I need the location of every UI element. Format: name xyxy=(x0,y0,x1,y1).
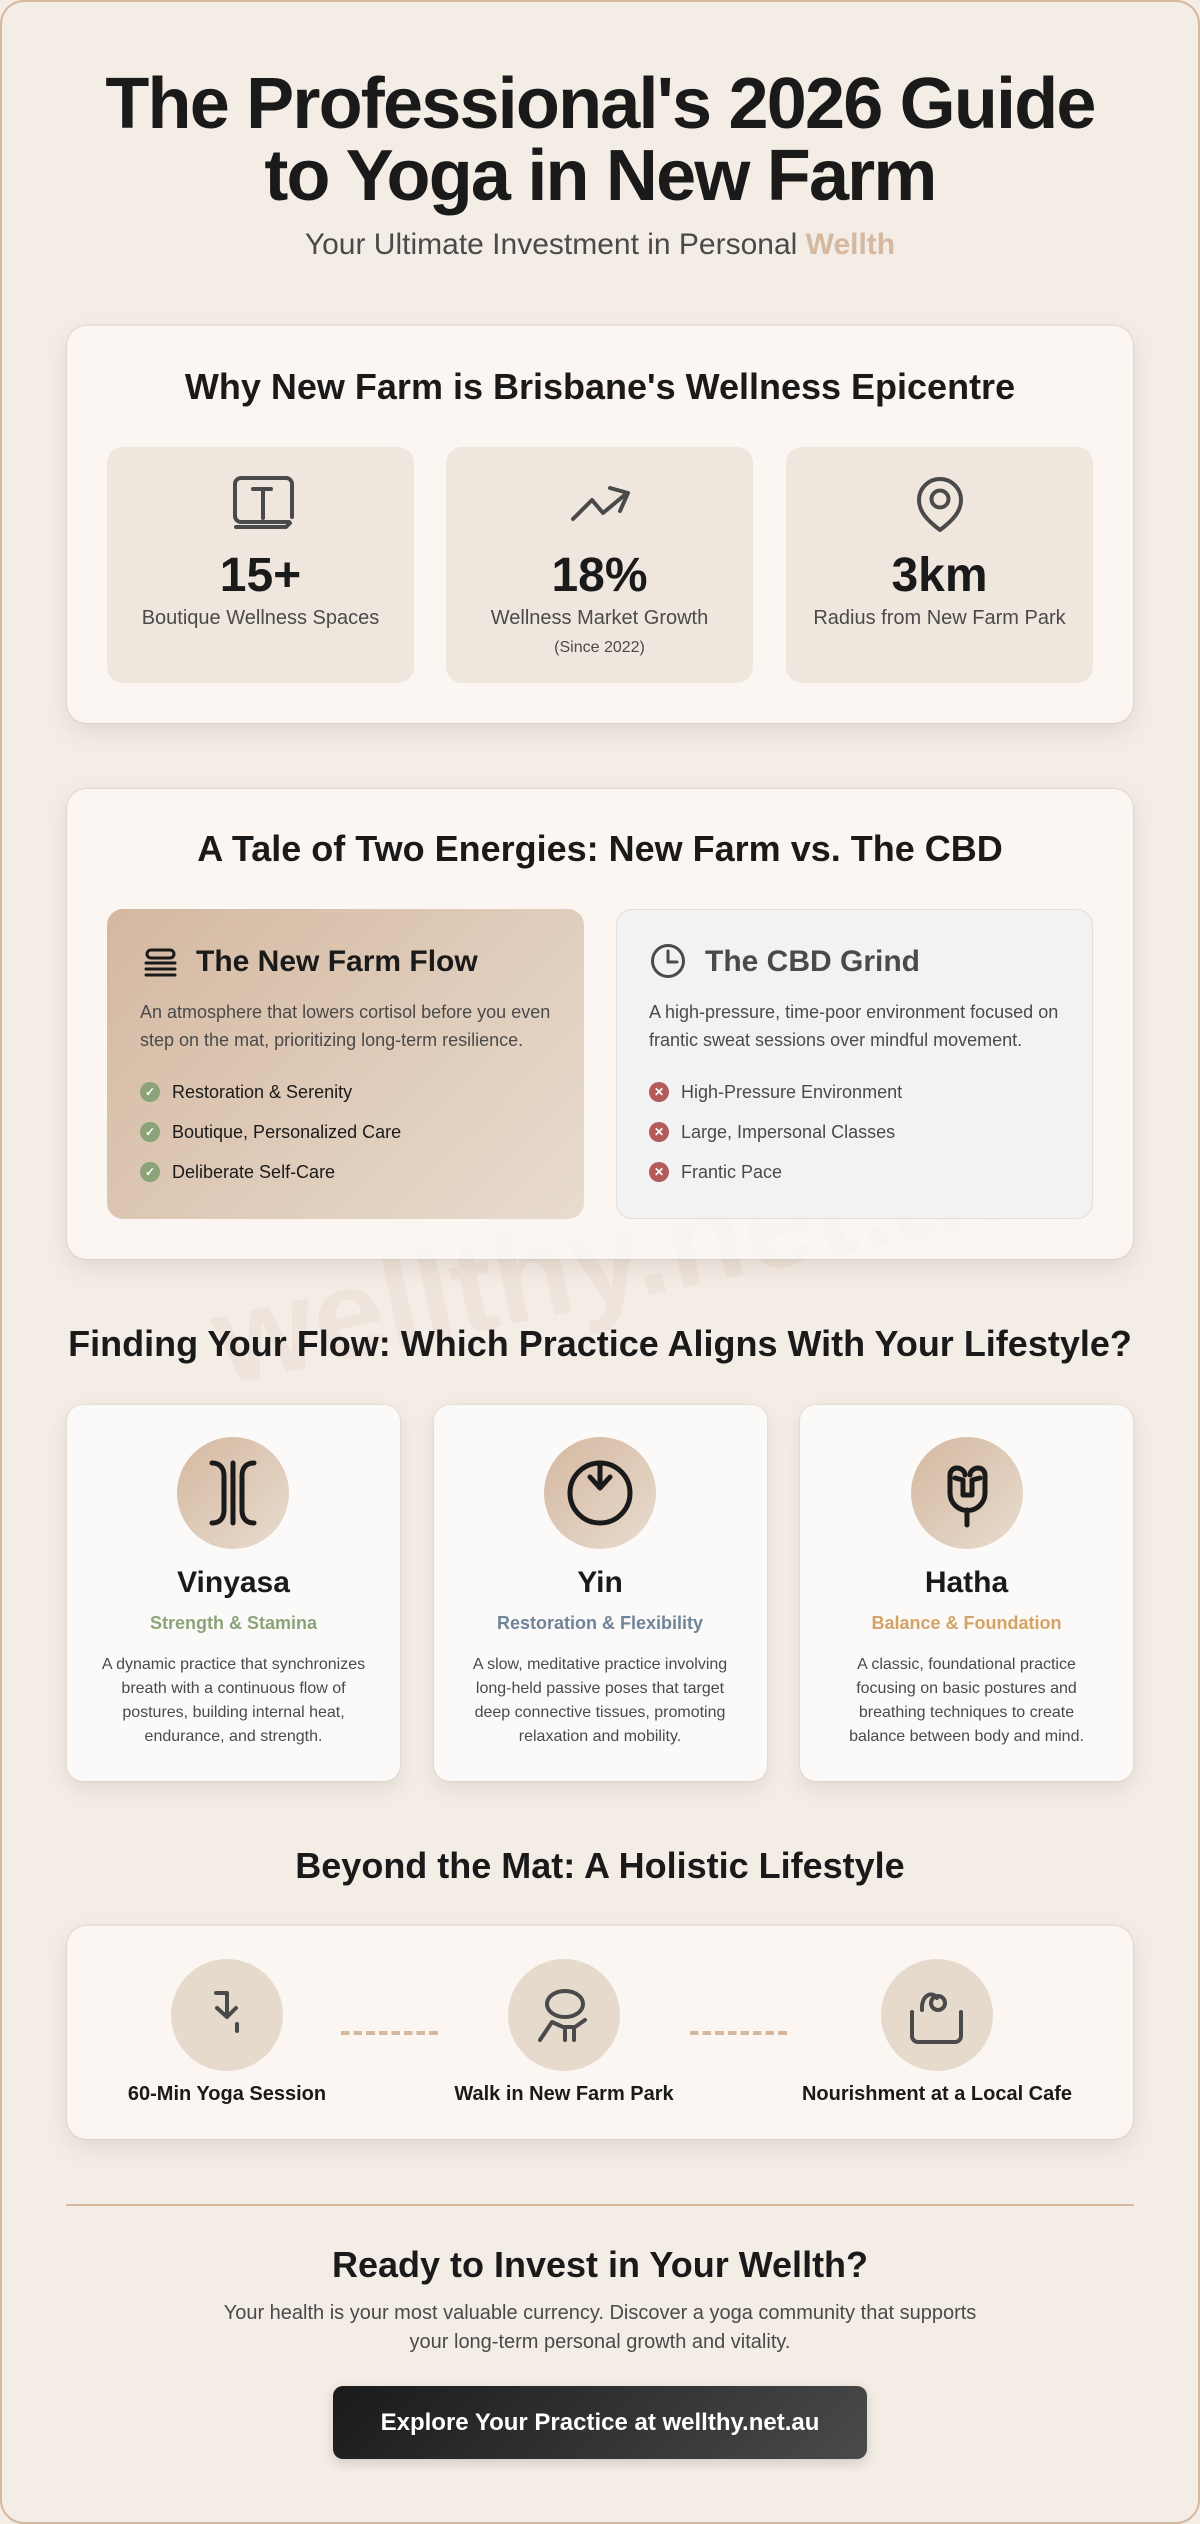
number: 18% xyxy=(551,549,648,602)
description: breath with a continuous flow of xyxy=(121,1680,346,1697)
description: long-held passive poses that target xyxy=(476,1680,724,1697)
icon: stacked lines xyxy=(144,948,176,976)
description xyxy=(140,1002,550,1050)
card: Vinyasa xyxy=(67,1405,400,1781)
item: Frantic Pace xyxy=(681,1162,782,1182)
button: Explore Your Practice at wellthy.net.au xyxy=(381,2409,819,2436)
stat: radius xyxy=(786,447,1093,683)
stat: market growth xyxy=(446,447,753,683)
description: postures, building internal heat, xyxy=(122,1704,345,1721)
item: Restoration & Serenity xyxy=(172,1082,352,1102)
item: High-Pressure Environment xyxy=(681,1082,902,1102)
text: your long-term personal growth and vitality. xyxy=(410,2331,790,2353)
focus: Strength & Stamina xyxy=(150,1613,317,1633)
focus: Balance & Foundation xyxy=(871,1613,1062,1633)
label: Wellness Market Growth xyxy=(491,607,708,629)
description: A high-pressure, time-poor environment focused on xyxy=(649,1002,1058,1022)
icon: clock xyxy=(651,944,685,978)
text: Your health is your most valuable currency. Discover a yoga community that supports xyxy=(224,2302,976,2324)
number: 15+ xyxy=(220,549,301,602)
icon: cup xyxy=(881,1959,993,2071)
card: CBD grind xyxy=(616,909,1093,1219)
number: 3km xyxy=(891,549,988,602)
name: Hatha xyxy=(925,1566,1008,1599)
name: Vinyasa xyxy=(177,1566,290,1599)
focus: Restoration & Flexibility xyxy=(497,1613,703,1633)
description: An atmosphere that lowers cortisol before you even xyxy=(140,1002,550,1022)
description: focusing on basic postures and xyxy=(856,1680,1077,1697)
item: ✓ xyxy=(145,1125,155,1139)
panel: tale of two energies xyxy=(67,789,1133,1259)
step: yoga session xyxy=(128,1959,326,2105)
connector xyxy=(690,2031,787,2035)
section heading: finding your flow: Finding Your Flow: Which Practice Aligns With Your Lifestyle? xyxy=(68,1323,1132,1364)
description xyxy=(849,1656,1084,1745)
title: to Yoga in New Farm xyxy=(264,136,936,216)
description: step on the mat, prioritizing long-term resilience. xyxy=(140,1030,523,1050)
text xyxy=(224,2302,976,2353)
heading: Ready to Invest in Your Wellth? xyxy=(332,2244,868,2285)
step: park walk xyxy=(454,1959,674,2105)
description: relaxation and mobility. xyxy=(519,1728,681,1745)
description: A dynamic practice that synchronizes xyxy=(102,1656,365,1673)
panel: lifestyle timeline xyxy=(67,1926,1133,2139)
connector xyxy=(341,2031,438,2035)
watermark: wellthy.net.au xyxy=(201,1099,1049,1412)
title: The Professional's 2026 Guide xyxy=(105,64,1095,144)
heading: The CBD Grind xyxy=(705,945,920,978)
item: ✓ xyxy=(145,1085,155,1099)
button xyxy=(333,2386,867,2459)
icon: tulip xyxy=(910,1437,1022,1549)
card: New Farm flow xyxy=(107,909,584,1219)
description: endurance, and strength. xyxy=(145,1728,322,1745)
description: frantic sweat sessions over mindful movement. xyxy=(649,1030,1022,1050)
item: ✕ xyxy=(654,1085,664,1099)
icon: flow lines xyxy=(177,1437,289,1549)
item: ✕ xyxy=(654,1165,664,1179)
description: A slow, meditative practice involving xyxy=(473,1656,727,1673)
item: Large, Impersonal Classes xyxy=(681,1122,895,1142)
name: Yin xyxy=(577,1566,623,1599)
step: cafe xyxy=(802,1959,1072,2105)
icon: walker xyxy=(508,1959,620,2071)
description xyxy=(649,1002,1058,1050)
label: Walk in New Farm Park xyxy=(454,2083,674,2105)
footer call to action xyxy=(66,2204,1134,2464)
description: deep connective tissues, promoting xyxy=(475,1704,725,1721)
item: Deliberate Self-Care xyxy=(172,1162,335,1182)
label: Radius from New Farm Park xyxy=(813,607,1066,629)
description xyxy=(102,1656,365,1745)
item: ✓ xyxy=(145,1165,155,1179)
description: A classic, foundational practice xyxy=(857,1656,1076,1673)
icon: studio board xyxy=(233,476,294,529)
item: Boutique, Personalized Care xyxy=(172,1122,401,1142)
card: Yin xyxy=(434,1405,766,1781)
description: breathing techniques to create xyxy=(859,1704,1074,1721)
stat: boutique spaces xyxy=(107,447,414,683)
panel: why New Farm xyxy=(67,326,1133,723)
icon: session arrow xyxy=(171,1959,283,2071)
section heading: beyond the mat: Beyond the Mat: A Holistic Lifestyle xyxy=(295,1845,905,1886)
card: Hatha xyxy=(800,1405,1133,1781)
header xyxy=(105,64,1095,261)
icon: circle with arrow xyxy=(544,1437,656,1549)
label: Nourishment at a Local Cafe xyxy=(802,2083,1072,2105)
label: 60-Min Yoga Session xyxy=(128,2083,326,2105)
label: Boutique Wellness Spaces xyxy=(142,607,379,629)
icon: map pin xyxy=(917,477,963,532)
description xyxy=(473,1656,727,1745)
subtitle: Your Ultimate Investment in Personal Wellth xyxy=(305,228,895,261)
heading: The New Farm Flow xyxy=(196,945,478,978)
heading: Why New Farm is Brisbane's Wellness Epicentre xyxy=(185,366,1015,407)
heading: A Tale of Two Energies: New Farm vs. The CBD xyxy=(197,828,1003,869)
note: (Since 2022) xyxy=(554,639,645,656)
title xyxy=(105,64,1095,216)
icon: trend arrow xyxy=(570,486,630,522)
description: balance between body and mind. xyxy=(849,1728,1084,1745)
item: ✕ xyxy=(654,1125,664,1139)
